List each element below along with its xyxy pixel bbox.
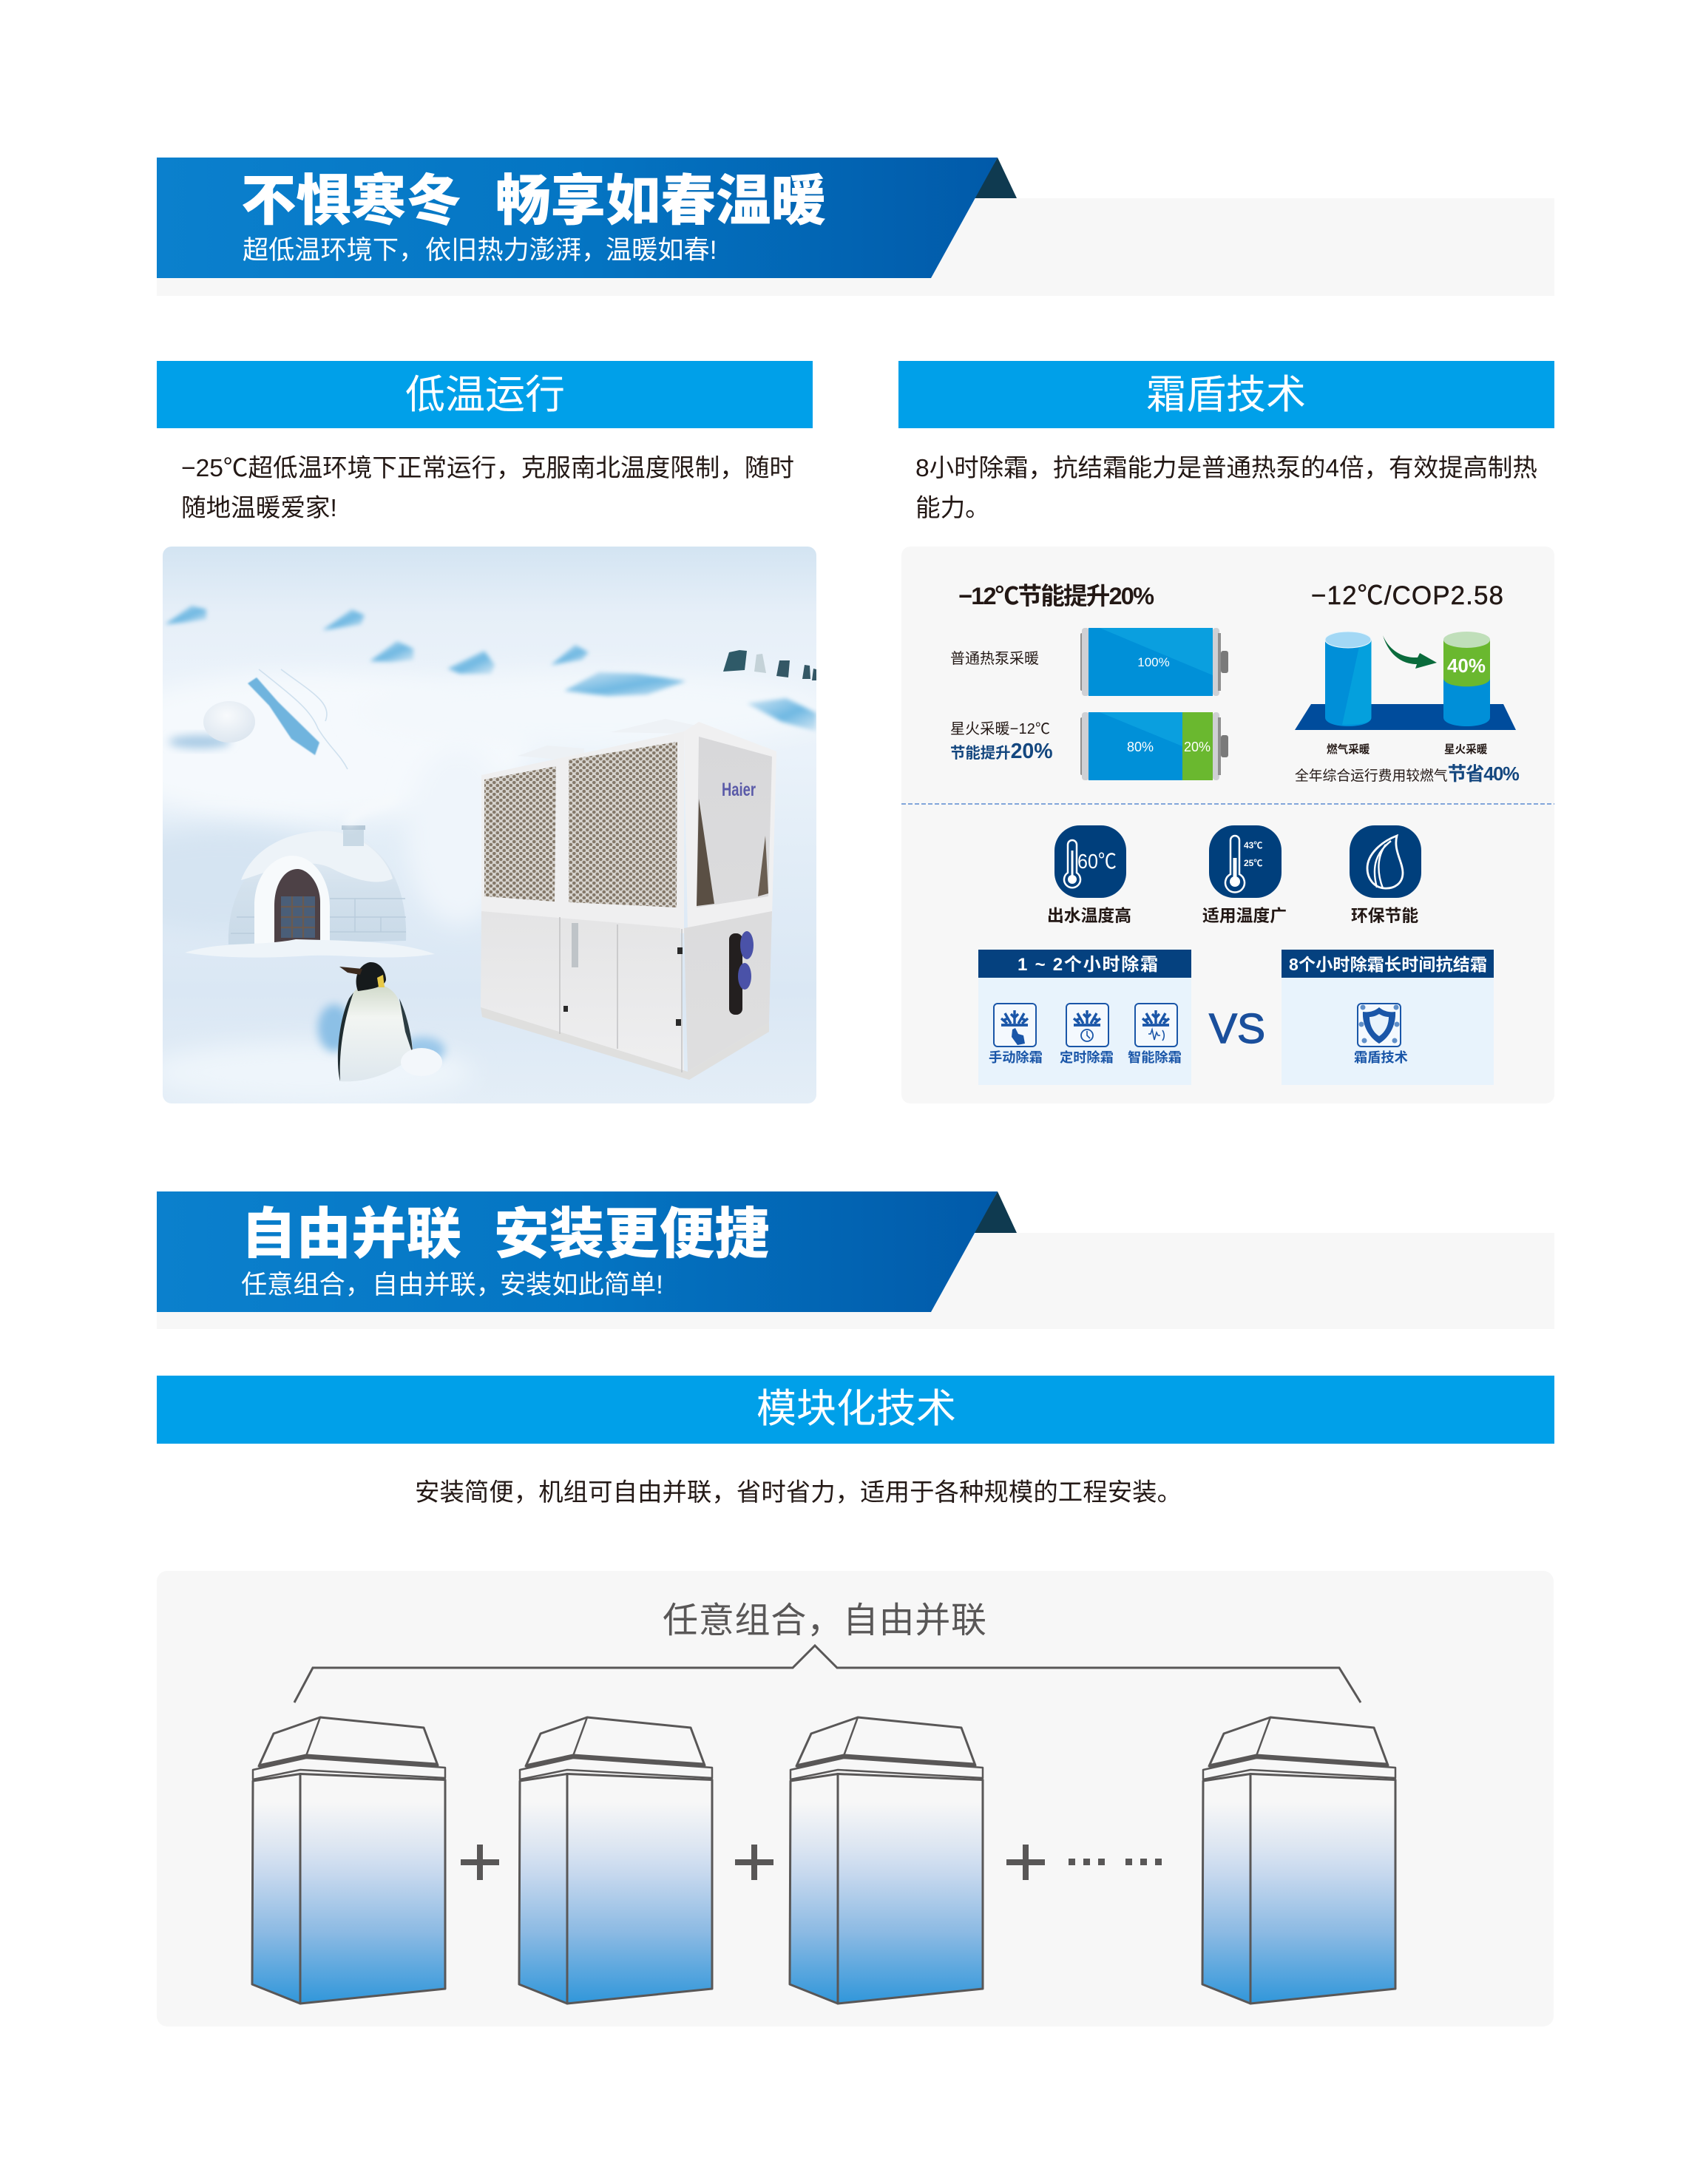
banner title: 畅享如春温暖 [495, 170, 826, 231]
icon: 60 degree thermometer [1054, 825, 1126, 898]
label: gas heating: 燃气采暖 [1327, 743, 1370, 756]
icon: 60 degree thermometer: 60℃ [1077, 850, 1117, 873]
plus sign 3 [1006, 1845, 1045, 1880]
battery: 80% 20%: 20% [1184, 740, 1211, 754]
icon: wide temperature range: 43℃ [1244, 840, 1262, 851]
panel: frost shield comparison [901, 547, 1554, 1103]
chart: cylinder comparison [1295, 632, 1516, 730]
banner title: 自由并联 [241, 1203, 461, 1265]
heading: COP: −12℃/COP2.58 [1311, 581, 1503, 610]
label: eco energy saving: 环保节能 [1351, 906, 1418, 925]
panel heading: 霜盾技术 [898, 361, 1554, 428]
text block: low temperature description: 随地温暖爱家! [181, 494, 337, 522]
module unit 4 [1202, 1717, 1395, 2004]
panel: free parallel combination [157, 1571, 1554, 2026]
banner subtitle: 依旧热力澎湃， [425, 236, 607, 265]
icon: timed defrost [1066, 1004, 1108, 1047]
panel heading: 霜盾技术: 霜盾技术 [1146, 373, 1306, 417]
banner subtitle: 温暖如春! [606, 236, 717, 265]
label: high water temperature: 出水温度高 [1047, 906, 1131, 925]
label: frost shield: 霜盾技术 [1354, 1050, 1408, 1065]
icon: wide temperature range [1209, 825, 1282, 898]
bracket [294, 1646, 1361, 1703]
igloo [185, 825, 435, 958]
heat pump unit [481, 719, 776, 1080]
panel heading: 模块化技术: 模块化技术 [756, 1387, 956, 1431]
text block: modular description: 安装简便，机组可自由并联，省时省力，适用于各种规模的工程安装。 [415, 1479, 1182, 1507]
banner subtitle: 安装如此简单! [500, 1271, 663, 1299]
label: smart defrost: 智能除霜 [1128, 1049, 1182, 1065]
icon: manual defrost [994, 1004, 1036, 1047]
module unit 2 [519, 1717, 712, 2004]
panel heading: 低温运行: 低温运行 [405, 373, 565, 417]
module unit 3 [790, 1717, 983, 2004]
battery: 80% 20% [1080, 712, 1228, 780]
Haier logo: Haier [722, 780, 756, 800]
section banner: 自由并联 [157, 1191, 1554, 1329]
banner subtitle: 超低温环境下， [243, 236, 424, 265]
comparison box: 1-2 hour defrost [978, 950, 1191, 1085]
battery: 80% 20%: 80% [1127, 740, 1154, 754]
icon: frost shield [1358, 1004, 1401, 1047]
text block: frost shield description [915, 454, 1537, 522]
ellipsis dots [1069, 1859, 1162, 1865]
text: VS: VS [1209, 1005, 1265, 1052]
comparison box: 8 hour defrost: 8个小时除霜长时间抗结霜 [1289, 955, 1487, 974]
ice ridges [165, 606, 816, 731]
label: timed defrost: 定时除霜 [1060, 1049, 1114, 1065]
text block: low temperature description [181, 454, 794, 522]
chart: cylinder comparison: 40% [1447, 655, 1486, 677]
photo: heat pump unit in snowy landscape [163, 547, 816, 1103]
label: ordinary heat pump: 普通热泵采暖 [950, 650, 1039, 667]
label: spark heating: 星火采暖−12℃ [950, 720, 1050, 737]
plus sign 1 [461, 1845, 499, 1880]
diagram title: 任意组合，自由并联 [663, 1601, 986, 1640]
label: manual defrost: 手动除霜 [989, 1049, 1043, 1065]
comparison box: 8 hour defrost [1282, 950, 1494, 1085]
penguin [318, 962, 445, 1081]
arrow: green curved [1383, 635, 1437, 669]
label: wide temperature range: 适用温度广 [1202, 906, 1287, 925]
comparison box: 1-2 hour defrost: 1 ~ 2个小时除霜 [1018, 955, 1158, 975]
text block: low temperature description: −25℃超低温环境下正常运行，克服南北温度限制，随时 [181, 454, 794, 482]
label: saving 20%: 节能提升20% [950, 740, 1053, 763]
battery: 100%: 100% [1137, 655, 1170, 669]
battery: 100% [1080, 628, 1228, 696]
distant penguins [723, 650, 816, 680]
icon: eco water drop [1350, 825, 1421, 898]
banner subtitle: 自由并联， [372, 1271, 502, 1299]
snowball [169, 735, 231, 748]
icon: wide temperature range: 25℃ [1244, 858, 1262, 868]
text: annual cost: 全年综合运行费用较燃气节省40% [1295, 764, 1519, 785]
label: spark heating: 星火采暖 [1444, 743, 1488, 756]
banner subtitle: 任意组合， [241, 1271, 371, 1299]
icon: smart defrost [1135, 1004, 1177, 1047]
heading: energy saving: −12℃节能提升20% [958, 583, 1154, 609]
steam [348, 795, 396, 825]
ski tracks [259, 669, 348, 769]
banner title: 安装更便捷 [494, 1203, 770, 1265]
panel heading: 低温运行 [157, 361, 813, 428]
text block: frost shield description: 能力。 [915, 494, 990, 522]
plus sign 2 [735, 1845, 773, 1880]
panel heading: 模块化技术 [157, 1376, 1554, 1444]
section banner: 不惧寒冬 [157, 158, 1554, 296]
text block: frost shield description: 8小时除霜，抗结霜能力是普通热泵的4倍，有效提高制热 [915, 454, 1537, 482]
module unit 1 [252, 1717, 445, 2004]
banner title: 不惧寒冬 [241, 170, 461, 231]
